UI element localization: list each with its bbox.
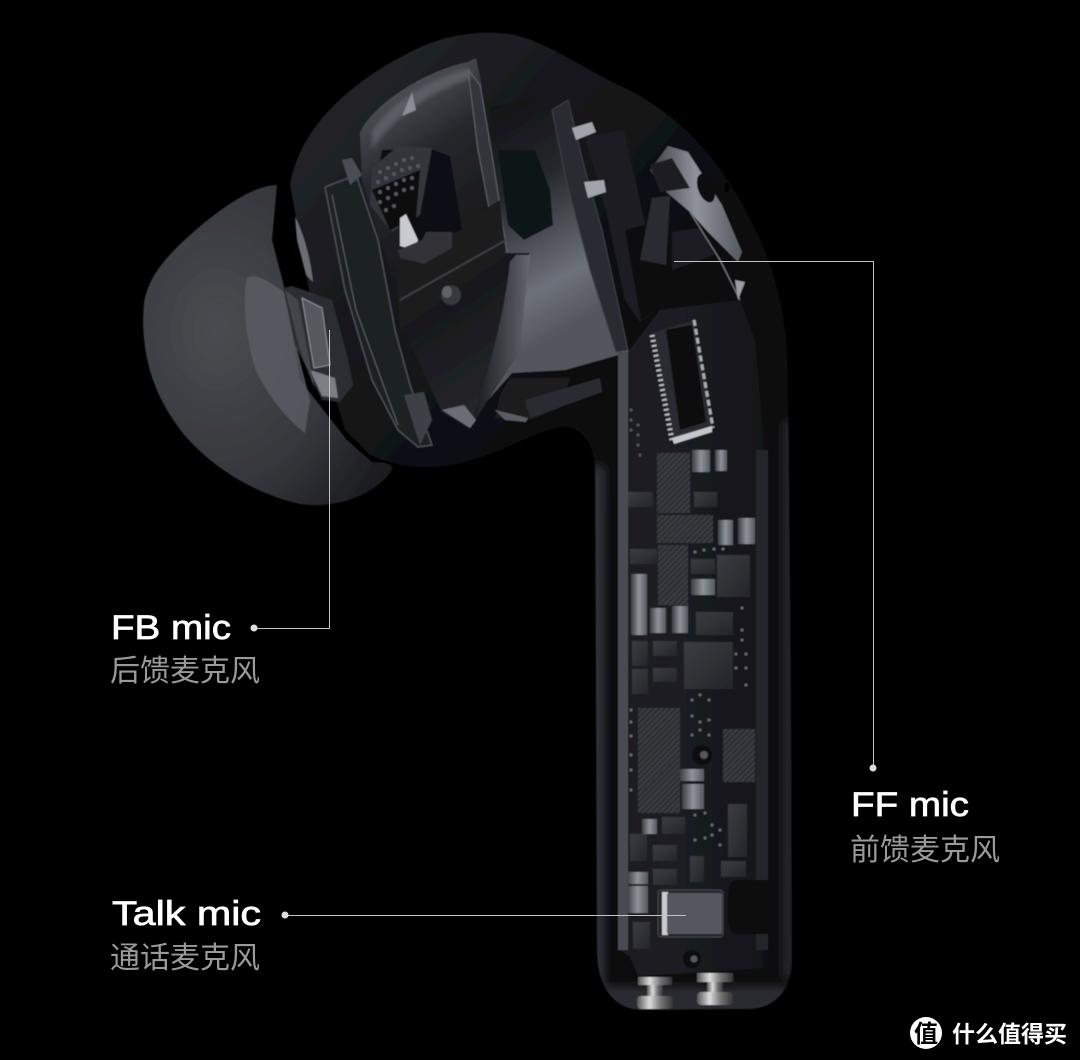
earbud illustration [143,25,800,1015]
leader line: FB mic [250,330,330,632]
driver flange [325,158,432,447]
label: Talk mic: 通话麦克风 [110,942,260,975]
rounded cavity [728,880,768,934]
stem PCB [618,300,768,1009]
watermark logo: 值 [914,1021,938,1048]
solder dots [630,548,748,846]
label: FB mic: 后馈麦克风 [110,655,260,688]
shiny capacitors [627,450,755,913]
test point holes [683,745,712,968]
contact pins [637,973,733,1009]
label: FF mic: FF mic [851,786,969,824]
components [627,450,768,968]
FB mic module [283,286,353,402]
leader line: Talk mic [282,912,686,918]
leader line: FF mic [674,262,876,772]
ear tip [143,185,392,505]
watermark logo [910,1017,1067,1049]
dark square components [628,492,750,949]
sound port gasket [295,217,313,282]
via dots upper [630,408,642,456]
connector bracket [705,305,750,345]
board pads [572,122,664,320]
speaker mesh window [370,146,462,264]
rear board strip [552,100,628,352]
label: FF mic [850,786,1000,867]
label: FB mic: FB mic [111,609,231,647]
watermark logo: 什么值得买 [952,1021,1067,1047]
housing inner window [498,150,553,240]
FF mic hinge [640,146,745,300]
lower bracket [495,378,602,422]
tall board [585,130,663,322]
earbud shell and stem [280,25,800,1015]
driver cap [360,58,530,428]
label: FB mic [110,609,260,688]
driver housing [470,93,629,420]
label: Talk mic [110,895,261,975]
hatched chips [638,453,755,813]
label: Talk mic: Talk mic [112,895,261,933]
label: FF mic: 前馈麦克风 [850,834,1000,867]
ribbon connector [652,320,713,444]
talk mic component [658,890,723,937]
